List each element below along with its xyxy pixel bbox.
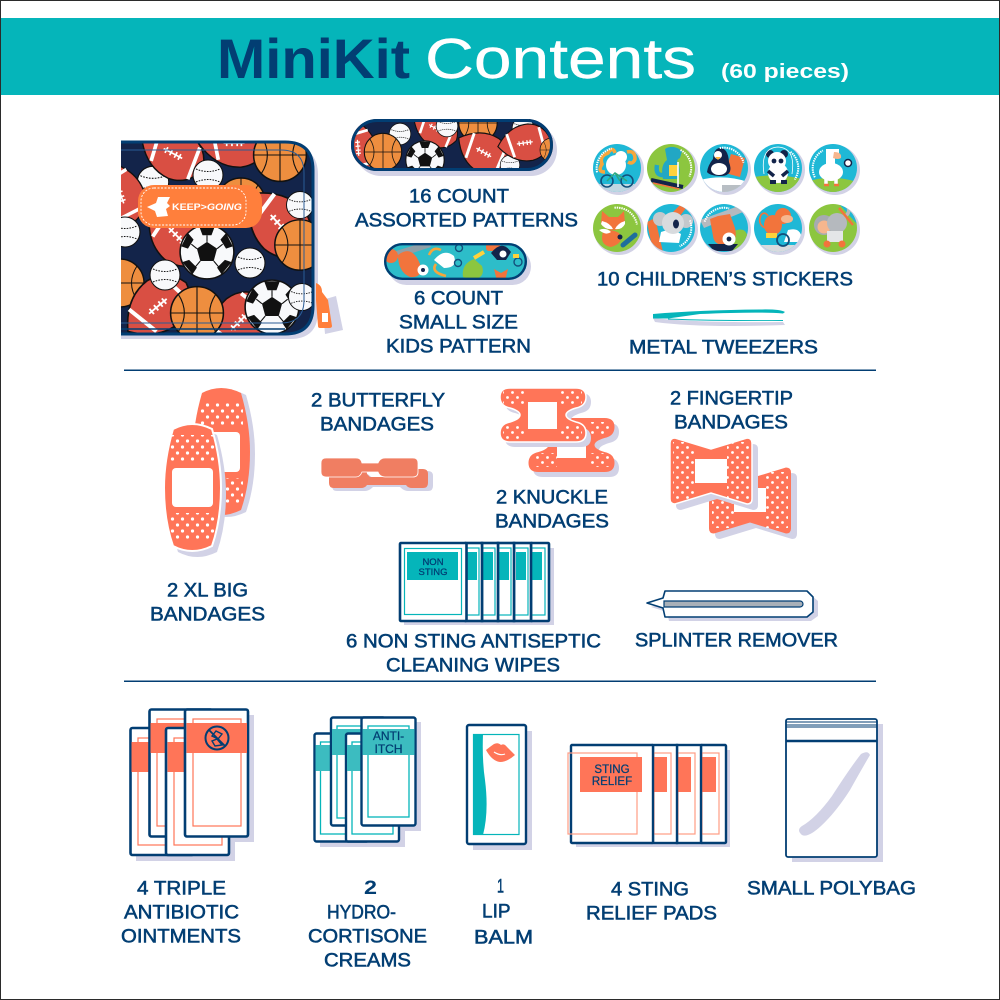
stickers grid — [593, 144, 860, 255]
label: butterfly: 2 BUTTERFLY — [311, 390, 445, 411]
icon: lips — [486, 743, 515, 762]
label: ointments: ANTIBIOTIC — [124, 902, 239, 923]
sting relief text: STING — [594, 764, 630, 776]
sticker: elephant — [809, 204, 860, 255]
label: XL bandages — [150, 580, 265, 625]
label: knuckle: 2 KNUCKLE — [496, 487, 608, 508]
kids pattern bandage — [384, 241, 531, 285]
label: ointments — [121, 878, 241, 947]
labels: sports patterns: 16 COUNT — [409, 186, 509, 207]
label: ointments: OINTMENTS — [121, 926, 241, 947]
label: creams: CORTISONE — [308, 926, 427, 947]
label: lip balm — [474, 876, 533, 948]
antiseptic wipes — [400, 543, 554, 625]
sting relief text: RELIEF — [592, 776, 632, 788]
label: creams: HYDRO- — [327, 902, 396, 923]
labels: kids pattern: KIDS PATTERN — [386, 336, 531, 357]
sticker: sloth — [700, 201, 751, 255]
label: fingertip: 2 FINGERTIP — [670, 388, 793, 409]
polybag — [786, 719, 883, 862]
label: butterfly — [311, 390, 445, 435]
wipe label text: STING — [418, 567, 448, 578]
label: stickers: 10 CHILDREN’S STICKERS — [597, 269, 853, 290]
labels: kids pattern: SMALL SIZE — [399, 312, 518, 333]
labels: kids pattern — [386, 288, 531, 357]
tweezers — [653, 309, 785, 326]
title: Contents: Contents — [425, 27, 696, 91]
sticker: fox — [593, 204, 644, 255]
bag highlight — [799, 752, 870, 836]
sticker: koala — [647, 204, 698, 255]
brand label — [138, 185, 262, 228]
title banner — [1, 18, 999, 95]
label: tweezers: METAL TWEEZERS — [629, 337, 818, 358]
sting relief pads — [568, 745, 730, 847]
section: ointments and pads — [121, 710, 916, 971]
label: creams: CREAMS — [324, 950, 411, 971]
labels: sports patterns — [355, 186, 578, 231]
sports pattern bandage — [351, 119, 557, 176]
butterfly bandages — [321, 458, 433, 491]
anti-itch text — [373, 729, 404, 756]
labels: kids pattern: 6 COUNT — [414, 288, 503, 309]
label: creams: 2 — [364, 878, 377, 899]
fingertip bandages — [670, 438, 797, 539]
label: sting relief — [586, 879, 717, 924]
label: splinter remover: SPLINTER REMOVER — [635, 630, 838, 651]
icon: no germs — [206, 726, 228, 750]
label: fingertip — [670, 388, 793, 433]
label: wipes: CLEANING WIPES — [386, 655, 560, 676]
zipper pull — [316, 283, 343, 334]
sticker: panda — [754, 144, 806, 195]
label: XL bandages: 2 XL BIG — [167, 580, 248, 601]
sticker: dinosaur — [647, 144, 699, 195]
label: wipes — [346, 631, 601, 676]
sting relief text — [592, 764, 632, 788]
label: wipes: 6 NON STING ANTISEPTIC — [346, 631, 601, 652]
wipe label text: NON — [422, 557, 444, 568]
anti-itch text: ITCH — [374, 742, 402, 756]
label: creams — [308, 878, 427, 971]
label: polybag: SMALL POLYBAG — [747, 878, 916, 899]
label: lip balm: BALM — [474, 927, 533, 948]
label: sting relief: 4 STING — [611, 879, 689, 900]
label: XL bandages: BANDAGES — [150, 604, 265, 625]
sticker: llama — [809, 144, 860, 195]
pouch with sports pattern — [121, 140, 343, 339]
anti-itch text: ANTI- — [373, 729, 404, 743]
label: butterfly: BANDAGES — [320, 414, 434, 435]
label: lip balm: LIP — [482, 901, 511, 922]
triple antibiotic ointments — [130, 710, 254, 861]
section: bandages and wipes — [150, 388, 838, 676]
hydrocortisone creams — [314, 718, 421, 847]
labels: sports patterns: ASSORTED PATTERNS — [355, 210, 578, 231]
label: fingertip: BANDAGES — [674, 412, 788, 433]
section: kit and top items — [121, 119, 860, 354]
XL bandages — [164, 388, 255, 557]
knuckle bandages — [500, 388, 619, 477]
title: MiniKit: MiniKit — [217, 27, 410, 90]
label: sting relief: RELIEF PADS — [586, 903, 717, 924]
wipe label text — [418, 557, 448, 578]
brand label: KEEP> GOING — [172, 202, 243, 213]
sticker: unicorn — [593, 144, 644, 195]
splinter remover — [647, 591, 818, 621]
lip balm — [467, 725, 532, 850]
sticker: monkey — [754, 204, 805, 255]
label: ointments: 4 TRIPLE — [137, 878, 226, 899]
piece count: (60 pieces) — [721, 61, 849, 83]
label: knuckle — [495, 487, 609, 532]
label: lip balm: 1 — [497, 876, 504, 897]
sticker: penguin — [700, 144, 751, 195]
label: knuckle: BANDAGES — [495, 511, 609, 532]
